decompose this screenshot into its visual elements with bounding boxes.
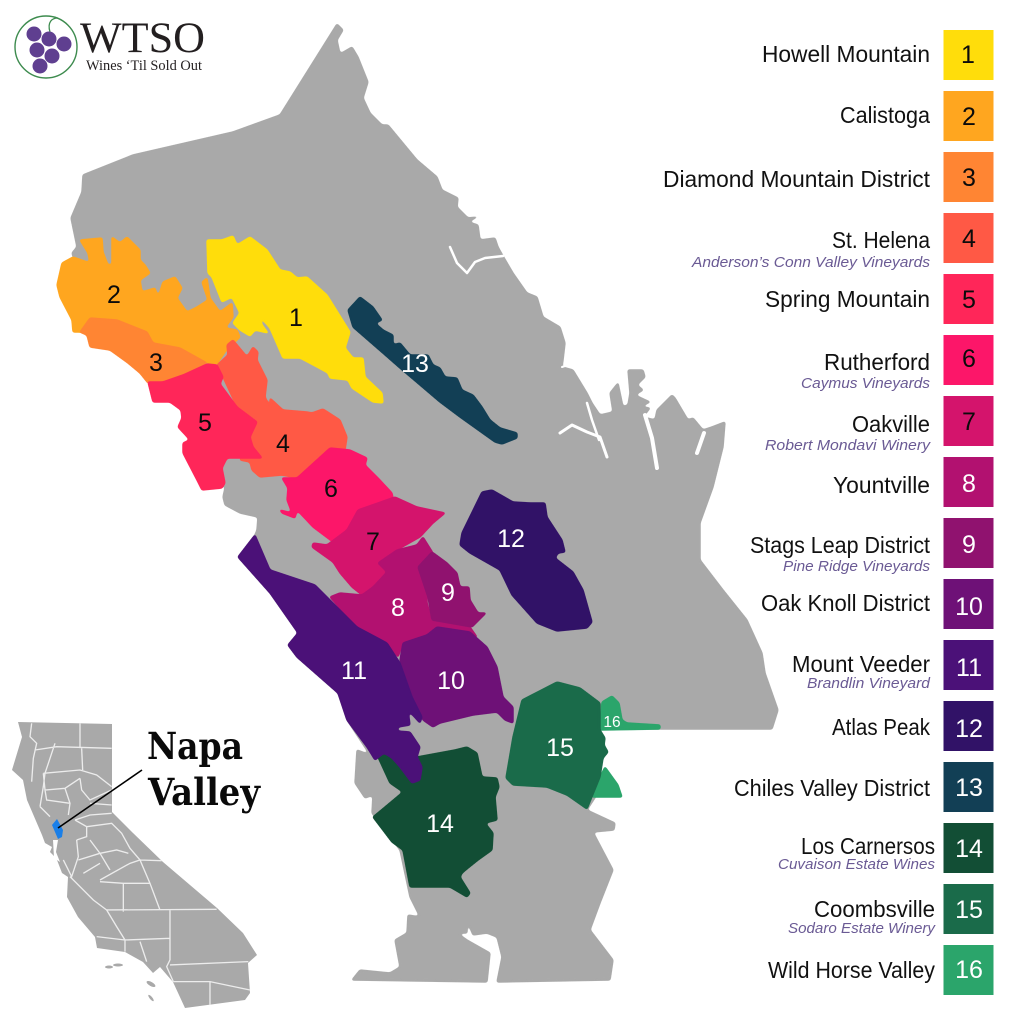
region 11: Mount Veeder [238,535,422,783]
legend item 13 [734,762,994,812]
legend item 9: Pine Ridge Vineyards [783,559,930,575]
region 2: Calistoga [57,237,240,364]
region 10: Oak Knoll District [400,627,513,727]
region 16: Wild Horse Valley: 16 [603,714,621,731]
legend item 7 [765,396,994,454]
legend item 14: Los Carnersos [801,833,935,859]
region 8: Yountville: 8 [391,594,405,622]
legend item 1: 1 [961,41,975,69]
callout arrow: Napa Valley pointer [58,770,142,828]
region 13: Chiles Valley District [348,297,517,444]
region 11: Mount Veeder: 11 [341,657,367,685]
region 4: St. Helena [217,340,347,478]
region 12: Atlas Peak [460,490,592,631]
legend item 7: Robert Mondavi Winery [765,438,931,454]
legend item 11: Brandlin Vineyard [807,676,931,692]
legend item 14: 14 [955,835,983,863]
legend item 12 [832,701,994,751]
logo: WTSO: WTSO [80,15,205,62]
legend item 5: 5 [962,286,976,314]
legend item 2: Calistoga [840,102,930,128]
region 6: Rutherford [280,448,393,542]
legend item 13: 13 [955,774,983,802]
legend item 14: Cuvaison Estate Wines [778,857,935,873]
legend item 5 [765,274,994,324]
legend item 4 [691,213,994,271]
map: Napa County base [71,24,778,982]
legend item 9: Stags Leap District [750,532,931,558]
legend item 16: Wild Horse Valley [768,957,935,983]
legend item 16: 16 [955,956,983,984]
region 9: Stags Leap District [418,552,486,627]
legend item 13: Chiles Valley District [734,775,931,801]
legend item 15: 15 [955,896,983,924]
region 4: St. Helena: 4 [276,430,290,458]
region 8: Yountville [330,537,477,657]
region 16: Wild Horse Valley [592,696,660,797]
region 5: Spring Mountain [148,364,262,490]
legend item 6: 6 [962,345,976,373]
legend item 6: Rutherford [824,349,930,375]
legend item 4: 4 [962,225,976,253]
logo: WTSO [15,15,205,78]
legend item 8 [833,457,994,507]
legend item 16 [768,945,994,995]
legend item 2: 2 [962,103,976,131]
legend item 10 [761,579,994,629]
callout: Napa Valley: Valley [147,770,261,814]
legend item 15: Sodaro Estate Winery [788,921,936,937]
legend item 9: 9 [962,531,976,559]
region 10: Oak Knoll District: 10 [437,667,465,695]
legend item 2 [840,91,994,141]
region 15: Coombsville [506,682,608,809]
legend item 1 [762,30,994,80]
legend item 3 [663,152,994,202]
legend [663,30,994,995]
region 9: Stags Leap District: 9 [441,579,455,607]
region 5: Spring Mountain: 5 [198,409,212,437]
legend item 11: Mount Veeder [792,651,930,677]
legend item 15 [788,884,994,937]
region 3: Diamond Mountain District [80,318,207,383]
legend item 11: 11 [956,654,982,682]
callout: Napa Valley [147,724,261,814]
inset map: California with Napa County highlighted [12,722,257,1008]
callout: Napa Valley: Napa [147,724,243,768]
legend item 3: Diamond Mountain District [663,166,931,192]
region 12: Atlas Peak: 12 [497,525,525,553]
region 7: Oakville: 7 [366,528,380,556]
legend item 5: Spring Mountain [765,286,930,312]
region 15: Coombsville: 15 [546,734,574,762]
region 6: Rutherford: 6 [324,475,338,503]
legend item 11 [792,640,994,692]
legend item 4: Anderson’s Conn Valley Vineyards [691,255,930,271]
legend item 12: 12 [955,715,983,743]
region 1: Howell Mountain [207,236,383,403]
legend item 14 [778,823,994,873]
region 1: Howell Mountain: 1 [289,304,303,332]
region 14: Los Carneros: 14 [426,810,454,838]
region 14: Los Carneros [373,747,499,897]
region 3: Diamond Mountain District: 3 [149,349,163,377]
legend item 3: 3 [962,164,976,192]
legend item 6: Caymus Vineyards [801,376,930,392]
region 7: Oakville [312,497,445,595]
legend item 9 [750,518,994,575]
legend item 6 [801,335,994,392]
legend item 7: 7 [962,408,976,436]
legend item 8: 8 [962,470,976,498]
legend item 1: Howell Mountain [762,41,930,67]
legend item 7: Oakville [852,411,930,437]
legend item 10: 10 [955,593,983,621]
region 13: Chiles Valley District: 13 [401,350,429,378]
logo: WTSO: Wines ‘Til Sold Out [86,58,202,74]
legend item 4: St. Helena [832,227,930,253]
legend item 8: Yountville [833,472,930,498]
legend item 12: Atlas Peak [832,714,930,740]
region 2: Calistoga: 2 [107,281,121,309]
legend item 15: Coombsville [814,896,935,922]
legend item 10: Oak Knoll District [761,590,931,616]
